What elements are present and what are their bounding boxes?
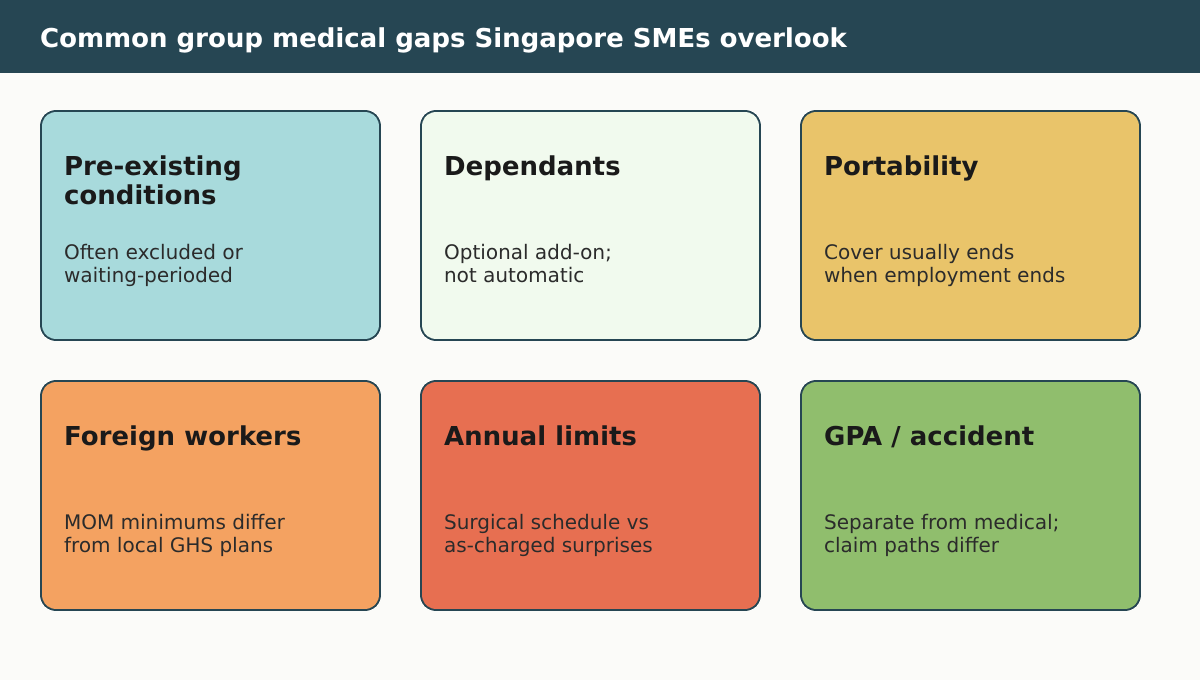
panel: dependants — [420, 110, 761, 341]
panel: pre-existing conditions — [40, 110, 381, 341]
panel: portability: when employment ends — [824, 263, 1065, 287]
panel: GPA / accident: GPA / accident — [824, 422, 1034, 452]
panel: portability: Cover usually ends — [824, 240, 1014, 264]
header banner — [0, 0, 1200, 73]
panel: dependants: not automatic — [444, 263, 584, 287]
panel: GPA / accident: Separate from medical; — [824, 510, 1059, 534]
panel: GPA / accident: claim paths differ — [824, 533, 1000, 557]
panel: annual limits: as-charged surprises — [444, 533, 653, 557]
panel: pre-existing conditions: Often excluded or — [64, 240, 244, 264]
panel: annual limits — [420, 380, 761, 611]
panel: foreign workers: Foreign workers — [64, 422, 301, 452]
panel: pre-existing conditions: waiting-perioded — [64, 263, 233, 287]
panel: foreign workers: MOM minimums differ — [64, 510, 286, 534]
title: Common group medical gaps Singapore SMEs overlook — [40, 24, 848, 54]
panel: annual limits: Annual limits — [444, 422, 637, 452]
panel: pre-existing conditions: Pre-existing — [64, 152, 242, 182]
panel: GPA / accident — [800, 380, 1141, 611]
panel: dependants: Dependants — [444, 152, 621, 182]
panel: pre-existing conditions: conditions — [64, 181, 216, 211]
panel: annual limits: Surgical schedule vs — [444, 510, 649, 534]
panel: portability: Portability — [824, 152, 978, 182]
panel: foreign workers: from local GHS plans — [64, 533, 273, 557]
panel: portability — [800, 110, 1141, 341]
panel: dependants: Optional add-on; — [444, 240, 612, 264]
panel: foreign workers — [40, 380, 381, 611]
